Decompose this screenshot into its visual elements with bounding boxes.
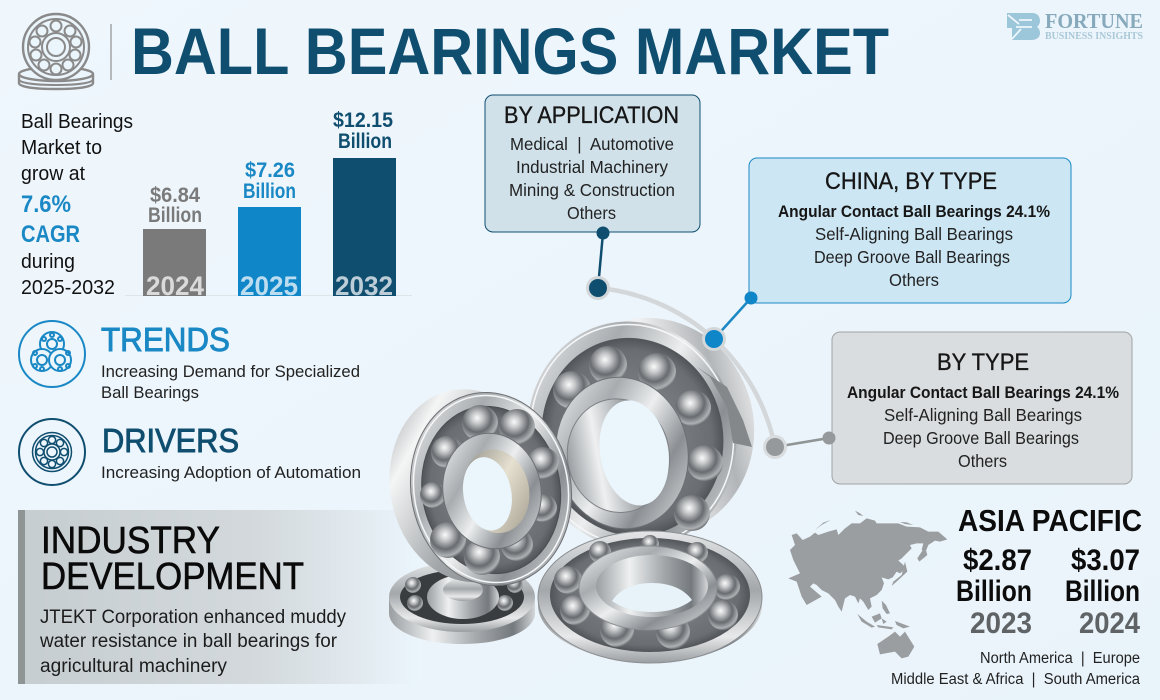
map: asia pacific	[788, 511, 947, 658]
heading: trends: TRENDS	[101, 321, 230, 358]
panel: china by type: Deep Groove Ball Bearings	[814, 247, 1010, 267]
region: asia pacific: Billion	[1065, 575, 1140, 608]
growth text: CAGR	[21, 221, 80, 248]
bar 2025	[238, 159, 301, 301]
bearing: back right	[505, 296, 777, 569]
bar 2025: 2025	[240, 271, 298, 301]
region: asia pacific: ASIA PACIFIC	[958, 503, 1142, 538]
bar 2032: $12.15	[333, 109, 393, 132]
panel: industry development: JTEKT Corporation enhanced muddy	[40, 607, 346, 628]
connector: china by type	[702, 292, 758, 351]
panel: china by type: CHINA, BY TYPE	[825, 168, 997, 195]
logo: Fortune Business Insights: FORTUNE	[1045, 9, 1143, 33]
region: asia pacific	[891, 503, 1142, 688]
region: asia pacific: Billion	[956, 575, 1032, 608]
panel: industry development: agricultural machinery	[40, 656, 227, 677]
region: asia pacific: $3.07	[1071, 544, 1140, 577]
header divider	[110, 24, 112, 80]
panel: industry development: water resistance in ball bearings for	[39, 631, 338, 652]
panel: china by type	[749, 158, 1071, 303]
panel: by application: Others	[567, 203, 616, 223]
bar 2024: 2024	[146, 271, 204, 301]
bearing: bottom left	[389, 562, 535, 644]
bar 2024: $6.84	[150, 184, 200, 207]
region: asia pacific: $2.87	[963, 544, 1032, 577]
growth text: Ball Bearings	[21, 111, 133, 133]
balls: front left	[420, 405, 559, 575]
bar 2025: Billion	[243, 180, 296, 203]
region: asia pacific: 2023	[970, 607, 1032, 640]
growth text: Market to	[21, 137, 102, 159]
panel: by type	[832, 332, 1132, 484]
bar 2024: Billion	[148, 204, 202, 227]
panel: by type: Self-Aligning Ball Bearings	[884, 405, 1082, 425]
heading: drivers: DRIVERS	[102, 422, 239, 459]
growth text: grow at	[21, 163, 85, 185]
photo: ball bearings	[374, 296, 777, 663]
panel: by application: BY APPLICATION	[504, 102, 679, 129]
growth text: 7.6%	[21, 191, 71, 218]
panel: industry development	[18, 510, 420, 684]
panel: china by type: Angular Contact Ball Bearings 24.1%	[778, 203, 1050, 221]
title: BALL BEARINGS MARKET	[131, 14, 889, 88]
growth text: during	[21, 251, 75, 273]
region: asia pacific: North America | Europe	[980, 650, 1140, 667]
panel: by application: Mining & Construction	[509, 180, 675, 200]
panel: by type: Others	[958, 451, 1007, 471]
bar 2032: 2032	[335, 271, 393, 301]
panel: by type: Deep Groove Ball Bearings	[883, 428, 1079, 448]
connector: by type	[763, 432, 836, 459]
growth text: 2025-2032	[21, 277, 115, 299]
header icon: bearing	[19, 14, 93, 89]
panel: by application: Medical | Automotive	[510, 134, 674, 154]
icon: drivers	[19, 419, 85, 485]
bearing: bottom right	[538, 531, 762, 663]
region: asia pacific: 2024	[1079, 607, 1140, 640]
panel: china by type: Self-Aligning Ball Bearings	[815, 224, 1013, 244]
connector: by application	[586, 226, 610, 300]
bearing: front left	[374, 373, 587, 602]
logo: Fortune Business Insights: BUSINESS INSIGHTS	[1045, 31, 1143, 42]
text: trends: Ball Bearings	[101, 383, 199, 402]
connector arc	[598, 288, 775, 447]
icon: trends	[19, 321, 85, 387]
bar 2024	[143, 184, 206, 301]
trends block	[19, 321, 360, 402]
panel: industry development: DEVELOPMENT	[41, 556, 304, 598]
growth text	[21, 111, 133, 299]
bar 2032	[333, 109, 396, 301]
panel: china by type: Others	[889, 270, 939, 290]
panel: industry development: INDUSTRY	[41, 520, 220, 562]
bar 2032: Billion	[338, 130, 392, 153]
bar 2025: $7.26	[245, 159, 295, 182]
drivers block	[19, 419, 361, 485]
panel: by application	[485, 95, 700, 232]
bar chart	[125, 109, 412, 301]
panel: by type: Angular Contact Ball Bearings 24.1%	[847, 384, 1119, 402]
region: asia pacific: Middle East & Africa | South America	[891, 671, 1140, 688]
panel: by application: Industrial Machinery	[516, 157, 668, 177]
text: drivers: Increasing Adoption of Automation	[101, 463, 361, 482]
text: trends: Increasing Demand for Specialized	[101, 362, 360, 381]
panel: by type: BY TYPE	[937, 349, 1029, 376]
text: trends	[101, 362, 360, 402]
logo: Fortune Business Insights	[1007, 9, 1143, 42]
